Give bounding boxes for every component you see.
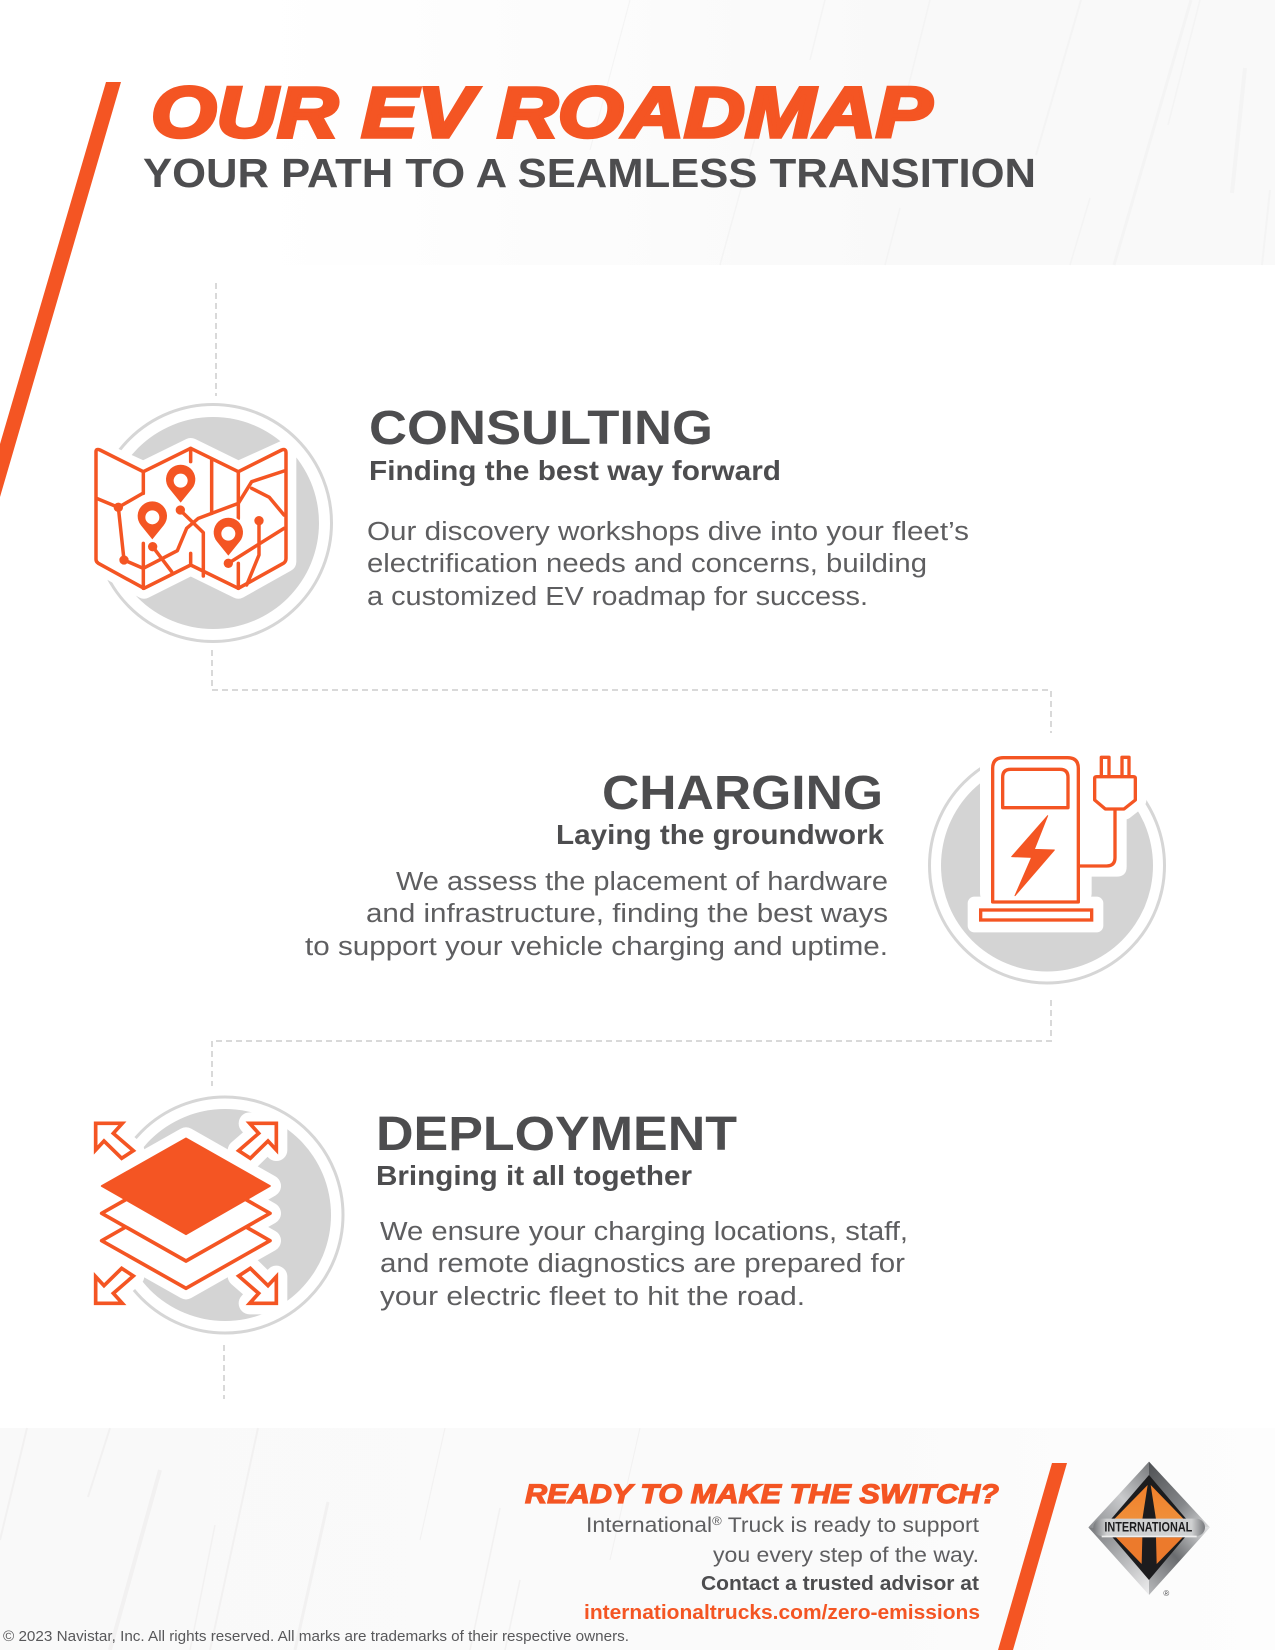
icon: EV charging station <box>930 743 1164 983</box>
panel: consulting <box>94 402 969 642</box>
icon: expanding layers <box>93 1097 343 1333</box>
callout: ready to make the switch <box>525 1479 999 1624</box>
panel: deployment <box>93 1097 908 1333</box>
text block: consulting: a customized EV roadmap for success. <box>367 583 868 611</box>
dashed connector: start to consulting <box>215 283 217 396</box>
text block: consulting: Our discovery workshops dive into your fleet’s <box>367 518 969 546</box>
heading: deployment: DEPLOYMENT <box>376 1108 737 1161</box>
callout link: internationaltrucks.com/zero-emissions <box>584 1601 980 1624</box>
dashed connector: deployment to end <box>223 1345 225 1399</box>
text block: charging: and infrastructure, finding the best ways <box>366 900 888 928</box>
callout body <box>586 1514 979 1595</box>
dashed connector: consulting to charging <box>212 650 1051 733</box>
logo: International diamond: INTERNATIONAL <box>1104 1519 1193 1535</box>
text block: charging: We assess the placement of hardware <box>396 868 888 896</box>
callout body: Truck is ready to support <box>722 1514 979 1537</box>
subheading: deployment: Bringing it all together <box>376 1160 692 1191</box>
panel: charging <box>305 743 1164 983</box>
subheading: charging: Laying the groundwork <box>556 819 884 850</box>
heading: charging: CHARGING <box>602 767 883 820</box>
accent slash: header <box>0 82 121 497</box>
text block: charging: to support your vehicle charging and uptime. <box>305 933 888 961</box>
logo: International diamond <box>1088 1462 1210 1598</box>
accent slash: footer <box>998 1463 1067 1650</box>
subtitle: YOUR PATH TO A SEAMLESS TRANSITION <box>143 150 1036 196</box>
dashed connector: charging to deployment <box>212 1000 1051 1086</box>
title: OUR EV ROADMAP <box>151 74 933 153</box>
text block: consulting: electrification needs and concerns, building <box>367 550 927 578</box>
heading: consulting: CONSULTING <box>369 402 713 455</box>
text block: consulting <box>367 518 969 611</box>
text block: charging <box>305 868 888 961</box>
subheading: consulting: Finding the best way forward <box>369 455 781 486</box>
logo: International diamond: ® <box>1163 1589 1169 1598</box>
text block: deployment: and remote diagnostics are prepared for <box>380 1250 906 1278</box>
bottom background band with streaks <box>0 1428 1275 1650</box>
callout body: International <box>586 1514 702 1537</box>
text block: deployment: We ensure your charging locations, staff, <box>380 1218 908 1246</box>
callout heading: READY TO MAKE THE SWITCH? <box>525 1479 999 1509</box>
top background band with streaks <box>0 0 1275 265</box>
text block: deployment: your electric fleet to hit the road. <box>380 1283 805 1311</box>
icon: folded map with pins <box>94 404 332 642</box>
callout body: ® <box>712 1514 722 1528</box>
copyright line: © 2023 Navistar, Inc. All rights reserved. All marks are trademarks of their respective owners. <box>3 1628 629 1645</box>
text block: deployment <box>380 1218 908 1311</box>
callout body: Contact a trusted advisor at <box>701 1572 979 1595</box>
callout body: you every step of the way. <box>713 1544 979 1567</box>
